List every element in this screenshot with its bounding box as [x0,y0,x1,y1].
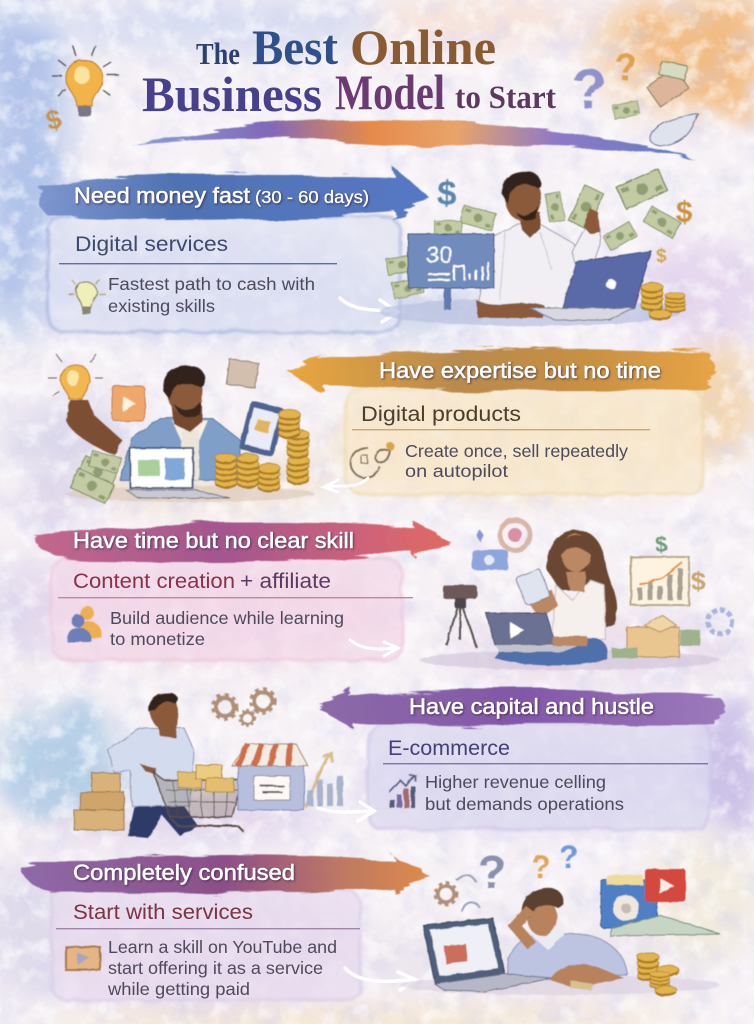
title [142,19,556,122]
panel: content creation card [52,558,402,660]
icon: video play [66,947,100,970]
banner arrow: have expertise [286,349,714,394]
illustration: smiling man with laptop and cash: 30 [426,242,453,269]
arrow: to illustration [350,640,398,656]
card heading: Digital services [75,233,228,256]
title: Best [252,19,338,75]
card description: to monetize [110,629,205,649]
icon: title decorations (dollars, question marks, cash, bag): $ [43,104,65,137]
panel: digital products card [345,388,703,494]
divider [56,928,360,929]
card description: existing skills [108,296,215,316]
title: Online [350,19,496,75]
banner text: Completely confused [73,860,295,885]
banner text: (30 - 60 days) [255,187,369,207]
brush swoosh under title [130,119,696,160]
divider [383,763,708,764]
arrow: to illustration [340,298,398,322]
icon: autopilot spiral [351,442,394,478]
banner text: Have expertise but no time [379,358,661,383]
banner text: Have capital and hustle [409,694,654,719]
card heading: Start with services [73,901,253,924]
icon: title decorations (dollars, question marks, cash, bag) [43,47,698,146]
section 5: completely confused [22,839,720,1000]
card description: while getting paid [107,979,250,999]
card description: Build audience while learning [110,608,344,628]
card description: Fastest path to cash with [108,274,315,294]
arrow: to illustration [345,968,416,990]
illustration: woman with laptop, tablet and tripod: $ [655,532,667,557]
panel: e-commerce card [368,723,710,829]
illustration: smiling man with laptop and cash: $ [437,174,456,213]
illustration: woman with laptop, tablet and tripod: $ [691,566,706,596]
panel: start with services card [52,890,360,1000]
illustration: man with bulb, laptop and coins [48,354,315,504]
divider [58,597,413,598]
section 2: have expertise but no time [48,349,714,504]
card description: Learn a skill on YouTube and [108,937,337,957]
divider [352,429,650,430]
icon: revenue chart [389,775,415,808]
icon: small bulb [68,280,105,314]
divider [59,263,337,264]
illustration: confused man at laptop with question marks: ? [478,846,506,898]
card description: but demands operations [425,794,624,814]
card description: Create once, sell repeatedly [405,441,628,461]
banner arrow: completely confused [22,855,428,894]
illustration: confused man at laptop with question marks [400,839,720,996]
card description: Higher revenue celling [425,772,606,792]
arrow: to illustration [324,478,368,492]
arrow: to card [318,802,374,821]
banner arrow: have time [36,520,450,561]
illustration: man pushing shopping cart beside shop [74,689,340,838]
illustration: smiling man with laptop and cash: $ [676,196,693,229]
icon: audience people [67,606,102,642]
section 4: have capital and hustle [74,688,724,838]
banner arrow: have capital [318,688,724,728]
title: Model [335,64,445,120]
icon: light bulb [52,45,119,116]
card description: start offering it as a service [108,958,323,978]
card heading: + affiliate [240,570,331,593]
illustration: woman with laptop, tablet and tripod [420,520,732,670]
icon: title decorations (dollars, question marks, cash, bag): ? [572,57,606,120]
illustration: smiling man with laptop and cash [380,169,693,326]
banner text: Need money fast [74,183,250,208]
title: Business [142,66,322,122]
banner arrow: need money fast [39,166,428,222]
card heading: Content creation [73,570,235,593]
illustration: confused man at laptop with question marks: ? [559,839,579,875]
card heading: E-commerce [388,737,510,760]
section 1: need money fast [39,166,693,332]
panel: digital services card [48,216,400,332]
illustration: smiling man with laptop and cash: $ [656,246,667,267]
title: The [196,36,240,71]
icon: title decorations (dollars, question marks, cash, bag): ? [614,47,637,89]
title: to Start [455,80,556,116]
banner text: Have time but no clear skill [73,528,354,553]
section 3: have time but no clear skill [36,520,732,670]
illustration: confused man at laptop with question marks: ? [531,849,551,885]
card heading: Digital products [361,403,521,426]
card description: on autopilot [405,461,508,481]
